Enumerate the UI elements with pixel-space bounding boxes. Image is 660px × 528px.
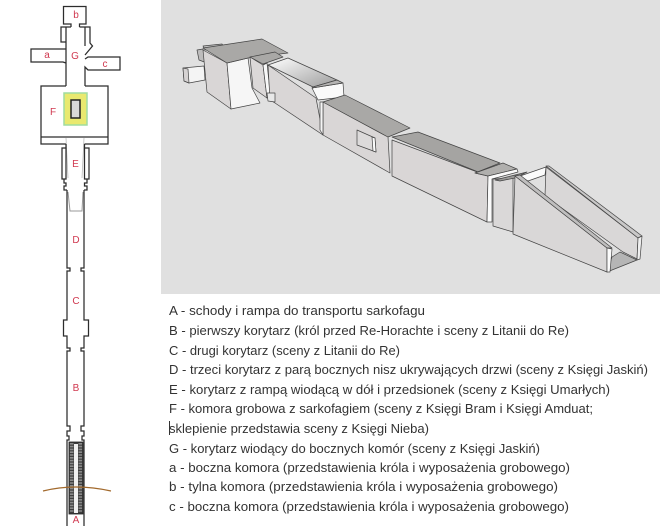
- legend lines: b - tylna komora (przedstawienia króla i wyposażenia grobowego): [169, 480, 558, 494]
- chamber F: [41, 86, 108, 144]
- plan labels: b: [73, 10, 79, 21]
- plan labels: C: [72, 296, 80, 307]
- sarcophagus: [71, 100, 80, 118]
- 3D model panel: [161, 0, 660, 294]
- long corridor: [392, 140, 488, 222]
- plan labels: a: [44, 50, 50, 61]
- plan labels: B: [73, 383, 80, 394]
- door chamber block: [250, 57, 267, 98]
- large block: [203, 50, 231, 109]
- plan labels: F: [50, 107, 56, 118]
- corridor with niche: [323, 102, 390, 173]
- plan labels: c: [102, 59, 108, 70]
- plan labels: D: [72, 235, 80, 246]
- stairs A: [69, 442, 83, 514]
- corridor E with ramp: [66, 138, 84, 178]
- legend lines: A - schody i rampa do transportu sarkofagu: [169, 304, 425, 318]
- legend lines: E - korytarz z rampą wiodącą w dół i przedsionek (sceny z Księgi Umarłych): [169, 383, 610, 397]
- text cursor: [169, 421, 170, 435]
- legend lines: C - drugi korytarz (sceny z Litanii do Re): [169, 344, 400, 358]
- floor plan of the tomb: [31, 6, 120, 526]
- legend lines: B - pierwszy korytarz (król przed Re-Horachte i sceny z Litanii do Re): [169, 324, 569, 338]
- small back pieces: [197, 49, 207, 63]
- corridor G with niche and side chambers a and c: [31, 27, 120, 86]
- legend lines: D - trzeci korytarz z parą bocznych nisz ukrywających drzwi (sceny z Księgi Jaskiń): [169, 363, 648, 377]
- plan labels: E: [72, 159, 79, 170]
- legend lines: sklepienie przedstawia sceny z Księgi Nieba): [169, 422, 429, 436]
- sarcophagus surround: [64, 93, 87, 125]
- corridor walls D, C, B: [64, 190, 88, 526]
- legend lines: c - boczna komora (przedstawienia króla i wyposażenia grobowego): [169, 500, 569, 514]
- ramp near wall: [513, 176, 607, 272]
- plan labels: A: [73, 515, 80, 526]
- ground line: [43, 487, 111, 491]
- ramp far wall: [545, 167, 638, 259]
- ramp in corridor D: [68, 192, 83, 211]
- vaulted section: [268, 65, 323, 135]
- chamber b: [64, 6, 86, 27]
- passage block: [493, 178, 513, 232]
- legend lines: a - boczna komora (przedstawienia króla i wyposażenia grobowego): [169, 461, 570, 475]
- legend lines: [169, 304, 648, 514]
- plan labels: G: [71, 51, 79, 62]
- panel background: [161, 0, 660, 294]
- legend text: [169, 304, 648, 514]
- plan labels: [44, 10, 108, 526]
- legend lines: F - komora grobowa z sarkofagiem (sceny z Księgi Bram i Księgi Amduat;: [169, 402, 593, 416]
- ramp floor: [607, 252, 637, 272]
- legend lines: G - korytarz wiodący do bocznych komór (sceny z Księgi Jaskiń): [169, 442, 540, 456]
- small left block: [183, 66, 205, 83]
